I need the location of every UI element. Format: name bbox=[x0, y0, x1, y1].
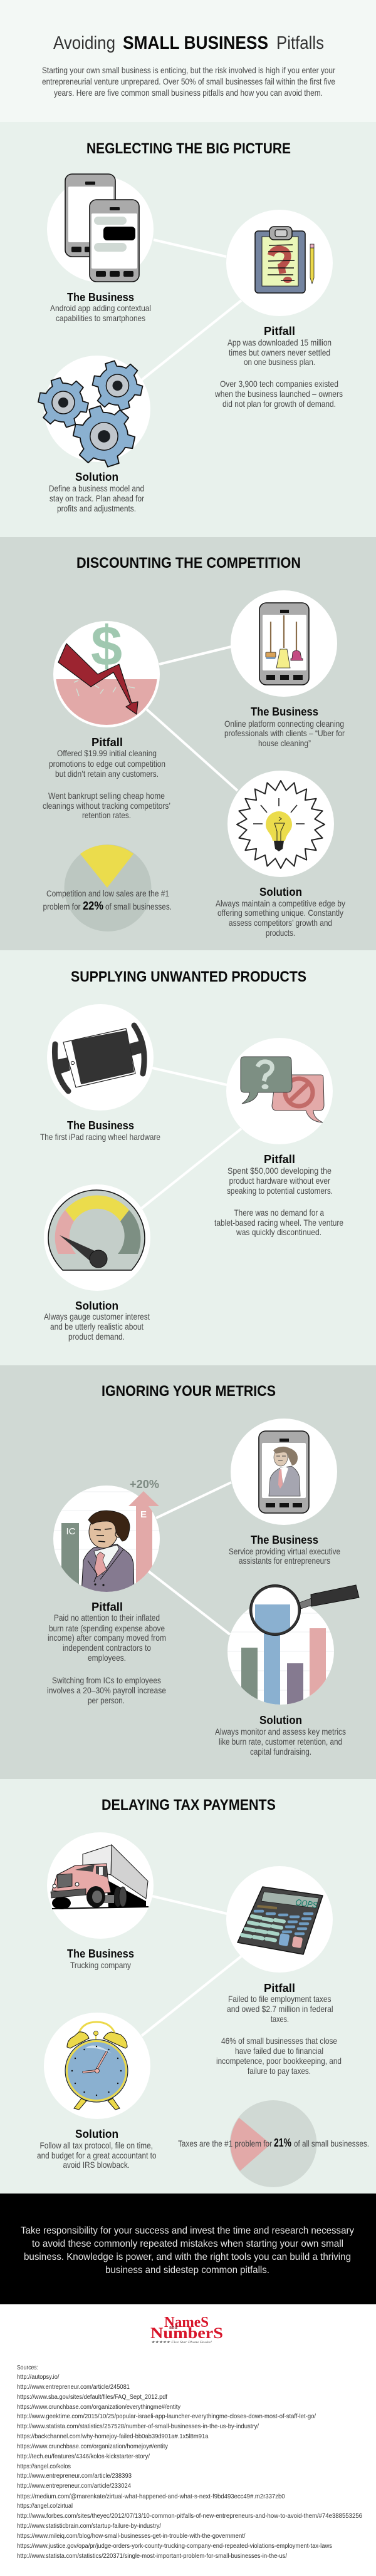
icon: bar chart with magnifier bbox=[226, 1585, 359, 1710]
panel: supplying unwanted products bbox=[0, 950, 376, 1365]
sources list: https://backchannel.com/why-homejoy-failed-bb0ab39d901a#.1x5l8m91a bbox=[17, 2433, 209, 2440]
sources list: https://medium.com/@marenkate/zirtual-what-happened-and-what-s-next-f9bd493ecc49#.m2r337zb0 bbox=[17, 2493, 285, 2500]
text: the business bbox=[67, 1947, 134, 1970]
text: pitfall: incompetence, poor bookkeeping, and bbox=[216, 2056, 342, 2066]
text: pitfall: retention rates. bbox=[82, 810, 131, 820]
icon: man with IC and E bars: IC bbox=[66, 1526, 76, 1537]
sources list: http://www.entrepreneur.com/article/238393 bbox=[17, 2472, 132, 2480]
text: pitfall: Over 3,900 tech companies existed bbox=[220, 379, 338, 389]
text: pitfall: taxes. bbox=[271, 2014, 289, 2024]
sources list: https://www.crunchbase.com/organization/everythingme#/entity bbox=[17, 2403, 181, 2411]
icon: falling dollar arrow bbox=[56, 623, 157, 725]
text: solution: Always maintain a competitive edge by bbox=[216, 898, 345, 908]
sources list: http://autopsy.io/ bbox=[17, 2373, 60, 2381]
text: solution bbox=[49, 471, 144, 513]
text: pitfall bbox=[43, 736, 170, 820]
text: the business: professionals with clients – “Uber for bbox=[224, 728, 345, 738]
text: solution: and budget for a great accountant to bbox=[37, 2150, 157, 2160]
text: pitfall bbox=[214, 325, 343, 409]
text: the business: The Business bbox=[67, 291, 134, 304]
text: pitfall: income) after company moved from bbox=[48, 1633, 166, 1643]
text: pitfall: Paid no attention to their inflated bbox=[54, 1613, 160, 1623]
pie chart: 22%: problem for bbox=[43, 901, 81, 911]
text: solution: Solution bbox=[75, 471, 118, 483]
icon: light bulb idea bbox=[237, 781, 325, 868]
text: pitfall: speaking to potential customers. bbox=[227, 1186, 333, 1196]
text: pitfall: on one business plan. bbox=[244, 357, 315, 367]
icon: man with IC and E bars: E bbox=[140, 1509, 147, 1520]
pie chart: 22%: Competition and low sales are the #1 bbox=[46, 888, 169, 898]
pie chart: 21%: 21% bbox=[274, 2137, 291, 2149]
sources list: http://www.statista.com/statistics/220371/single-most-important-problem-for-small-businesses-in-the-us/ bbox=[17, 2552, 287, 2560]
title: Avoiding bbox=[53, 33, 115, 53]
panel: delaying tax payments bbox=[0, 1779, 376, 2194]
text: solution: offering something unique. Constantly bbox=[217, 908, 343, 918]
text: solution bbox=[216, 886, 345, 938]
logo: Names and Numbers bbox=[150, 2314, 223, 2344]
text: solution: Follow all tax protocol, file on time, bbox=[40, 2140, 153, 2150]
icon: falling dollar arrow: $ bbox=[91, 615, 122, 678]
title: Pitfalls bbox=[276, 33, 324, 53]
text: solution: assess competitors’ growth and bbox=[229, 918, 332, 928]
panel: header bbox=[0, 0, 376, 122]
text: pitfall: Pitfall bbox=[264, 1982, 295, 1994]
icon: three gears bbox=[34, 357, 147, 471]
text: pitfall: have failed due to financial bbox=[235, 2046, 323, 2056]
text: pitfall: per person. bbox=[88, 1695, 125, 1705]
text: pitfall: did not plan for growth of demand. bbox=[222, 399, 336, 409]
text: the business: Trucking company bbox=[70, 1960, 131, 1970]
title bbox=[53, 33, 324, 53]
text: solution: Solution bbox=[75, 1300, 118, 1312]
text: pitfall: Offered $19.99 initial cleaning bbox=[57, 748, 157, 758]
sources list: https://angel.co/kolos bbox=[17, 2463, 71, 2470]
text: pitfall: Went bankrupt selling cheap home bbox=[48, 791, 165, 801]
icon: truck bbox=[51, 1845, 149, 1909]
sources list: https://angel.co/zirtual bbox=[17, 2502, 73, 2510]
logo: Names and Numbers: NumberS bbox=[150, 2325, 223, 2342]
icon: speedometer gauge bbox=[48, 1190, 145, 1270]
sources list: https://www.justice.gov/opa/pr/judge-orders-york-county-trucking-company-end-repeated-violations-employment-tax-laws bbox=[17, 2542, 332, 2550]
text: the business: Android app adding contextual bbox=[50, 303, 151, 313]
text: the business: Online platform connecting cleaning bbox=[224, 719, 344, 729]
sources list: https://www.sba.gov/sites/default/files/FAQ_Sept_2012.pdf bbox=[17, 2393, 167, 2401]
logo: Names and Numbers: and bbox=[169, 2324, 177, 2330]
icon: alarm clock bbox=[65, 2022, 128, 2110]
text: solution: stay on track. Plan ahead for bbox=[50, 493, 144, 503]
panel: ignoring your metrics bbox=[0, 1365, 376, 1779]
text: the business bbox=[229, 1534, 340, 1566]
panel: conclusion bbox=[0, 2194, 376, 2304]
sources list: https://www.crunchbase.com/organization/homejoy#/entity bbox=[17, 2443, 169, 2450]
text: the business: house cleaning” bbox=[258, 738, 311, 748]
text: pitfall: independent contractors to bbox=[63, 1643, 151, 1653]
text: solution: product demand. bbox=[68, 1332, 125, 1342]
text: the business: The Business bbox=[67, 1947, 134, 1960]
text: solution bbox=[44, 1300, 150, 1342]
text: pitfall: cleanings without tracking competitors’ bbox=[43, 801, 170, 811]
icon: calculator bbox=[238, 1887, 323, 1954]
heading: DELAYING TAX PAYMENTS bbox=[102, 1797, 276, 1814]
text: pitfall: times but owners never settled bbox=[229, 347, 330, 357]
text: pitfall: 46% of small businesses that close bbox=[221, 2036, 337, 2046]
icon: man with IC and E bars bbox=[53, 1478, 160, 1600]
text: pitfall: employees. bbox=[88, 1653, 126, 1663]
text: the business: Service providing virtual executive bbox=[229, 1546, 340, 1556]
text: solution bbox=[37, 2128, 157, 2170]
text: pitfall bbox=[214, 1153, 343, 1237]
panel: conclusion: Take responsibility for your success and invest the time and research necessary bbox=[21, 2225, 354, 2236]
text: pitfall: but didn’t retain any customers. bbox=[55, 769, 159, 779]
panel: conclusion: business and sidestep common pitfalls. bbox=[105, 2265, 269, 2276]
text: pitfall: tablet-based racing wheel. The venture bbox=[214, 1218, 343, 1228]
text: pitfall: burn rate (spending expense above bbox=[49, 1623, 165, 1633]
text: the business bbox=[50, 291, 151, 323]
panel: conclusion: to avoid these commonly repeated mistakes when starting your own small bbox=[32, 2239, 343, 2249]
text: solution: avoid IRS blowback. bbox=[63, 2160, 130, 2170]
sources list bbox=[17, 2364, 362, 2560]
text: the business: assistants for entrepreneurs bbox=[239, 1556, 330, 1566]
icon: two smartphones bbox=[65, 174, 139, 282]
text: pitfall: Pitfall bbox=[91, 736, 123, 749]
pie chart: 22% bbox=[43, 844, 172, 931]
panel: discounting the competition bbox=[0, 537, 376, 950]
icon: phone with virtual assistant bbox=[259, 1431, 309, 1513]
text: solution bbox=[215, 1714, 346, 1757]
text: pitfall: involves a 20–30% payroll increase bbox=[47, 1685, 166, 1695]
title: SMALL BUSINESS bbox=[123, 33, 268, 53]
text: the business bbox=[224, 706, 345, 748]
text: pitfall: Pitfall bbox=[91, 1601, 123, 1613]
icon: calculator: OOPS bbox=[295, 1897, 318, 1911]
text: the business: The Business bbox=[67, 1119, 134, 1132]
text: the business: The Business bbox=[251, 1534, 318, 1546]
text: pitfall: Pitfall bbox=[264, 1153, 295, 1166]
panel: conclusion: business. Knowledge is power, and with the right tools you can build a thriving bbox=[24, 2252, 351, 2262]
icon: tablet racing wheel bbox=[55, 1025, 144, 1091]
text: the business: The first iPad racing wheel hardware bbox=[40, 1132, 160, 1142]
text: pitfall bbox=[216, 1982, 342, 2076]
text: solution: Solution bbox=[75, 2128, 118, 2140]
sources list: Sources: bbox=[17, 2364, 38, 2371]
text: solution: Define a business model and bbox=[49, 483, 144, 493]
logo: Names and Numbers: ★★★★★ Five Star Phone Books! bbox=[151, 2341, 212, 2344]
text: solution: Solution bbox=[259, 1714, 302, 1727]
text: solution: Always gauge customer interest bbox=[44, 1311, 150, 1321]
heading: DISCOUNTING THE COMPETITION bbox=[76, 555, 301, 572]
text: pitfall: promotions to edge out competition bbox=[49, 759, 165, 769]
text: solution: profits and adjustments. bbox=[57, 503, 136, 513]
text: pitfall: product hardware without ever bbox=[229, 1176, 330, 1186]
pie chart: 21%: Taxes are the #1 problem for bbox=[178, 2138, 272, 2148]
text: pitfall: Pitfall bbox=[264, 325, 295, 337]
pie chart: 22%: of small businesses. bbox=[105, 901, 172, 911]
text: solution: capital fundraising. bbox=[250, 1747, 311, 1757]
sources list: http://www.entrepreneur.com/article/233024 bbox=[17, 2482, 131, 2490]
text: the business: The Business bbox=[251, 706, 318, 718]
text: pitfall: Switching from ICs to employees bbox=[52, 1675, 161, 1685]
text: pitfall: failure to pay taxes. bbox=[248, 2066, 311, 2076]
text: solution: Always monitor and assess key metrics bbox=[215, 1727, 346, 1737]
logo: Names and Numbers: NameS bbox=[164, 2314, 209, 2331]
text: pitfall: was quickly discontinued. bbox=[236, 1227, 321, 1237]
text: the business bbox=[40, 1119, 160, 1142]
heading: NEGLECTING THE BIG PICTURE bbox=[86, 140, 291, 157]
sources list: http://www.statista.com/statistics/257528/number-of-small-businesses-in-the-us-by-industry/ bbox=[17, 2423, 259, 2430]
heading: IGNORING YOUR METRICS bbox=[102, 1383, 276, 1400]
text: solution: Solution bbox=[259, 886, 302, 898]
text: solution: products. bbox=[266, 928, 295, 938]
sources list: http://tech.eu/features/4346/kolos-kickstarter-story/ bbox=[17, 2453, 150, 2460]
text: pitfall: Failed to file employment taxes bbox=[228, 1994, 331, 2004]
sources list: http://www.statisticbrain.com/startup-failure-by-industry/ bbox=[17, 2522, 161, 2530]
intro text: years. Here are five common small business pitfalls and how you can avoid them. bbox=[54, 88, 323, 98]
sources list: http://www.geektime.com/2015/10/25/popular-israeli-app-launcher-everythingme-closes-down-most-of-staff-let-go/ bbox=[17, 2413, 316, 2420]
icon: speech bubbles bbox=[241, 1057, 324, 1122]
text: solution: like burn rate, customer retention, and bbox=[219, 1737, 342, 1747]
text: pitfall: and owed $2.7 million in federal bbox=[227, 2004, 333, 2014]
text: pitfall: App was downloaded 15 million bbox=[227, 337, 332, 347]
sources list: http://www.entrepreneur.com/article/245081 bbox=[17, 2383, 130, 2391]
icon: man with IC and E bars: +20% bbox=[130, 1478, 159, 1491]
text: pitfall: Spent $50,000 developing the bbox=[227, 1166, 332, 1176]
text: the business: capabilities to smartphones bbox=[56, 313, 145, 323]
icon: phone with cleaning tools bbox=[259, 603, 309, 685]
intro text bbox=[42, 65, 335, 98]
icon: clipboard with question mark bbox=[255, 227, 314, 293]
text: pitfall: There was no demand for a bbox=[234, 1208, 324, 1218]
panel: neglecting the big picture bbox=[0, 122, 376, 537]
heading: SUPPLYING UNWANTED PRODUCTS bbox=[71, 968, 306, 985]
sources list: https://www.mileiq.com/blog/how-small-businesses-get-in-trouble-with-the-government/ bbox=[17, 2532, 246, 2540]
text: pitfall: when the business launched – owners bbox=[214, 389, 343, 399]
text: solution: and be utterly realistic about bbox=[50, 1321, 144, 1332]
pie chart: 22%: 22% bbox=[83, 900, 103, 912]
text: pitfall bbox=[47, 1601, 166, 1705]
pie chart: 21% bbox=[178, 2100, 369, 2187]
